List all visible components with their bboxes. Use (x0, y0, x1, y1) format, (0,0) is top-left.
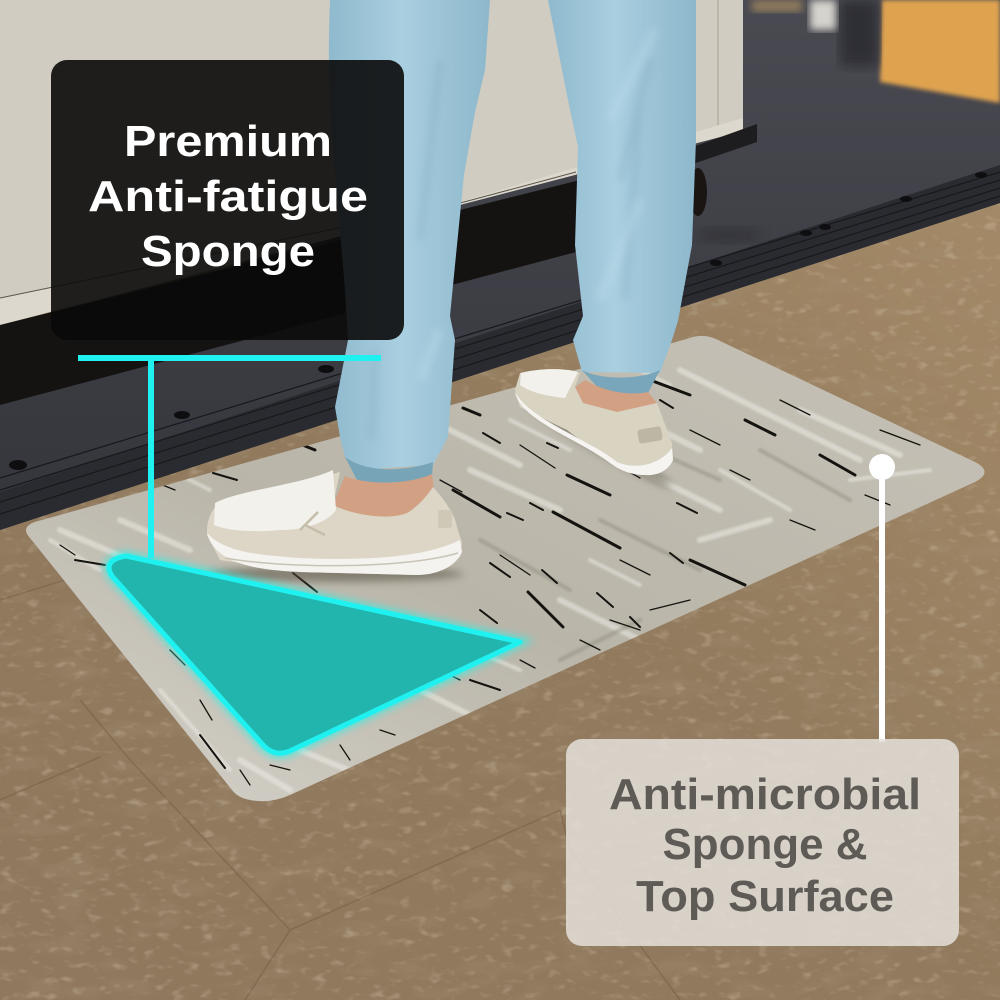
heading: anti-microbial sponge and top surface: Sponge & (662, 820, 868, 869)
cabinet (0, 0, 743, 325)
white canvas toe (214, 470, 336, 531)
right leg (548, 0, 696, 373)
caster bar and wheel (690, 124, 757, 165)
white canvas toe (520, 369, 578, 398)
white sole (207, 533, 462, 575)
background blurred objects (880, 0, 1000, 103)
dark mat (0, 0, 1000, 530)
light marble veins (50, 360, 930, 790)
heading: anti-microbial sponge and top surface (609, 770, 921, 921)
callout: anti-microbial sponge and top surface panel (566, 739, 959, 946)
heel badge (637, 426, 663, 444)
shoe body (515, 369, 673, 475)
heading: premium anti-fatigue sponge: Premium (124, 117, 332, 166)
ankle skin (333, 474, 434, 518)
anti-fatigue mat (26, 336, 984, 801)
shoe body (207, 472, 462, 575)
black marble streaks (60, 380, 920, 785)
callout: premium anti-fatigue sponge panel (51, 60, 404, 340)
left leg (329, 0, 490, 470)
highlighted sponge cross-section triangle (109, 556, 520, 753)
black base under cabinet (0, 165, 640, 405)
shoe shadows (207, 397, 675, 582)
heading: anti-microbial sponge and top surface: Top Surface (636, 872, 894, 921)
white sole (515, 392, 673, 475)
ankle skin (575, 380, 657, 414)
connector: cyan bracket line to sponge (78, 355, 381, 558)
connector: white dot and line to top surface (869, 454, 895, 742)
shoe: left foot (207, 470, 462, 575)
heading: anti-microbial sponge and top surface: Anti-microbial (609, 770, 921, 819)
shoe: right foot (515, 369, 673, 475)
person: legs and trousers (329, 0, 696, 484)
heading: premium anti-fatigue sponge: Anti-fatigue (88, 172, 368, 221)
heading: premium anti-fatigue sponge: Sponge (141, 227, 315, 276)
heading: premium anti-fatigue sponge (88, 117, 368, 276)
